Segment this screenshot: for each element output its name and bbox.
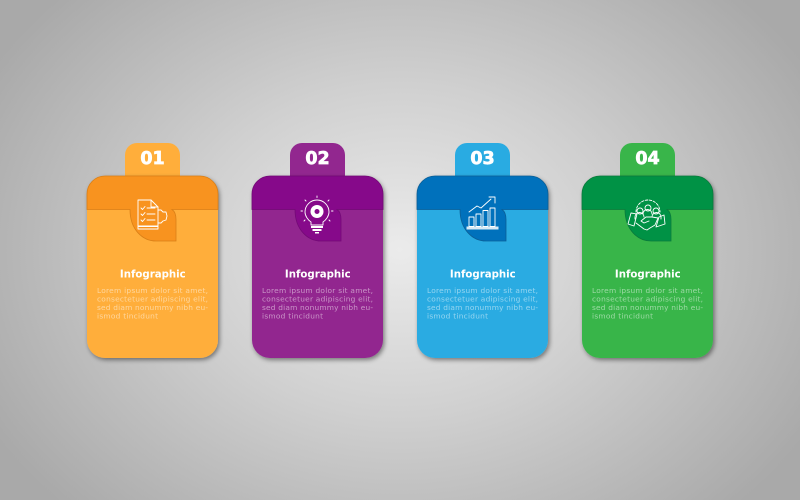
panel: card 03 — [417, 143, 548, 358]
icon: growth chart — [466, 197, 498, 230]
number tab 01: 01 — [140, 149, 165, 169]
description 04: consectetuer adipiscing elit, — [592, 294, 703, 303]
icon: handshake with team gear — [628, 200, 665, 230]
description 01: sed diam nonummy nibh eu- — [97, 303, 208, 312]
card body 01 — [87, 176, 218, 358]
card body 02 — [252, 176, 383, 358]
description 04 — [592, 286, 703, 321]
description 03: ismod tincidunt — [427, 312, 488, 321]
icon: light bulb with gear — [301, 196, 333, 234]
description 04: ismod tincidunt — [592, 312, 653, 321]
description 03: Lorem ipsum dolor sit amet, — [427, 286, 538, 295]
header band 01 — [87, 176, 218, 241]
number tab 02 — [290, 143, 345, 176]
description 01: ismod tincidunt — [97, 312, 158, 321]
description 02 — [262, 286, 373, 321]
panel: card 02 — [252, 143, 383, 358]
heading 03: Infographic — [450, 269, 516, 280]
description 03 — [427, 286, 538, 321]
description 02: ismod tincidunt — [262, 312, 323, 321]
description 02: Lorem ipsum dolor sit amet, — [262, 286, 373, 295]
description 04: sed diam nonummy nibh eu- — [592, 303, 703, 312]
number tab 03: 03 — [470, 149, 495, 169]
description 03: sed diam nonummy nibh eu- — [427, 303, 538, 312]
description 02: sed diam nonummy nibh eu- — [262, 303, 373, 312]
heading 01: Infographic — [120, 269, 186, 280]
header band 02 — [252, 176, 383, 241]
heading 02: Infographic — [285, 269, 351, 280]
icon: checklist document — [138, 200, 167, 229]
number tab 02: 02 — [305, 149, 330, 169]
card body 03 — [417, 176, 548, 358]
description 03: consectetuer adipiscing elit, — [427, 294, 538, 303]
description 01 — [97, 286, 208, 321]
description 02: consectetuer adipiscing elit, — [262, 294, 373, 303]
card body 04 — [582, 176, 713, 358]
description 01: consectetuer adipiscing elit, — [97, 294, 208, 303]
header band 04 — [582, 176, 713, 241]
number tab 04: 04 — [635, 149, 660, 169]
panel: card 01 — [87, 143, 218, 358]
heading 04: Infographic — [615, 269, 681, 280]
number tab 01 — [125, 143, 180, 176]
header band 03 — [417, 176, 548, 241]
description 01: Lorem ipsum dolor sit amet, — [97, 286, 208, 295]
number tab 04 — [620, 143, 675, 176]
description 04: Lorem ipsum dolor sit amet, — [592, 286, 703, 295]
panel: card 04 — [582, 143, 713, 358]
number tab 03 — [455, 143, 510, 176]
